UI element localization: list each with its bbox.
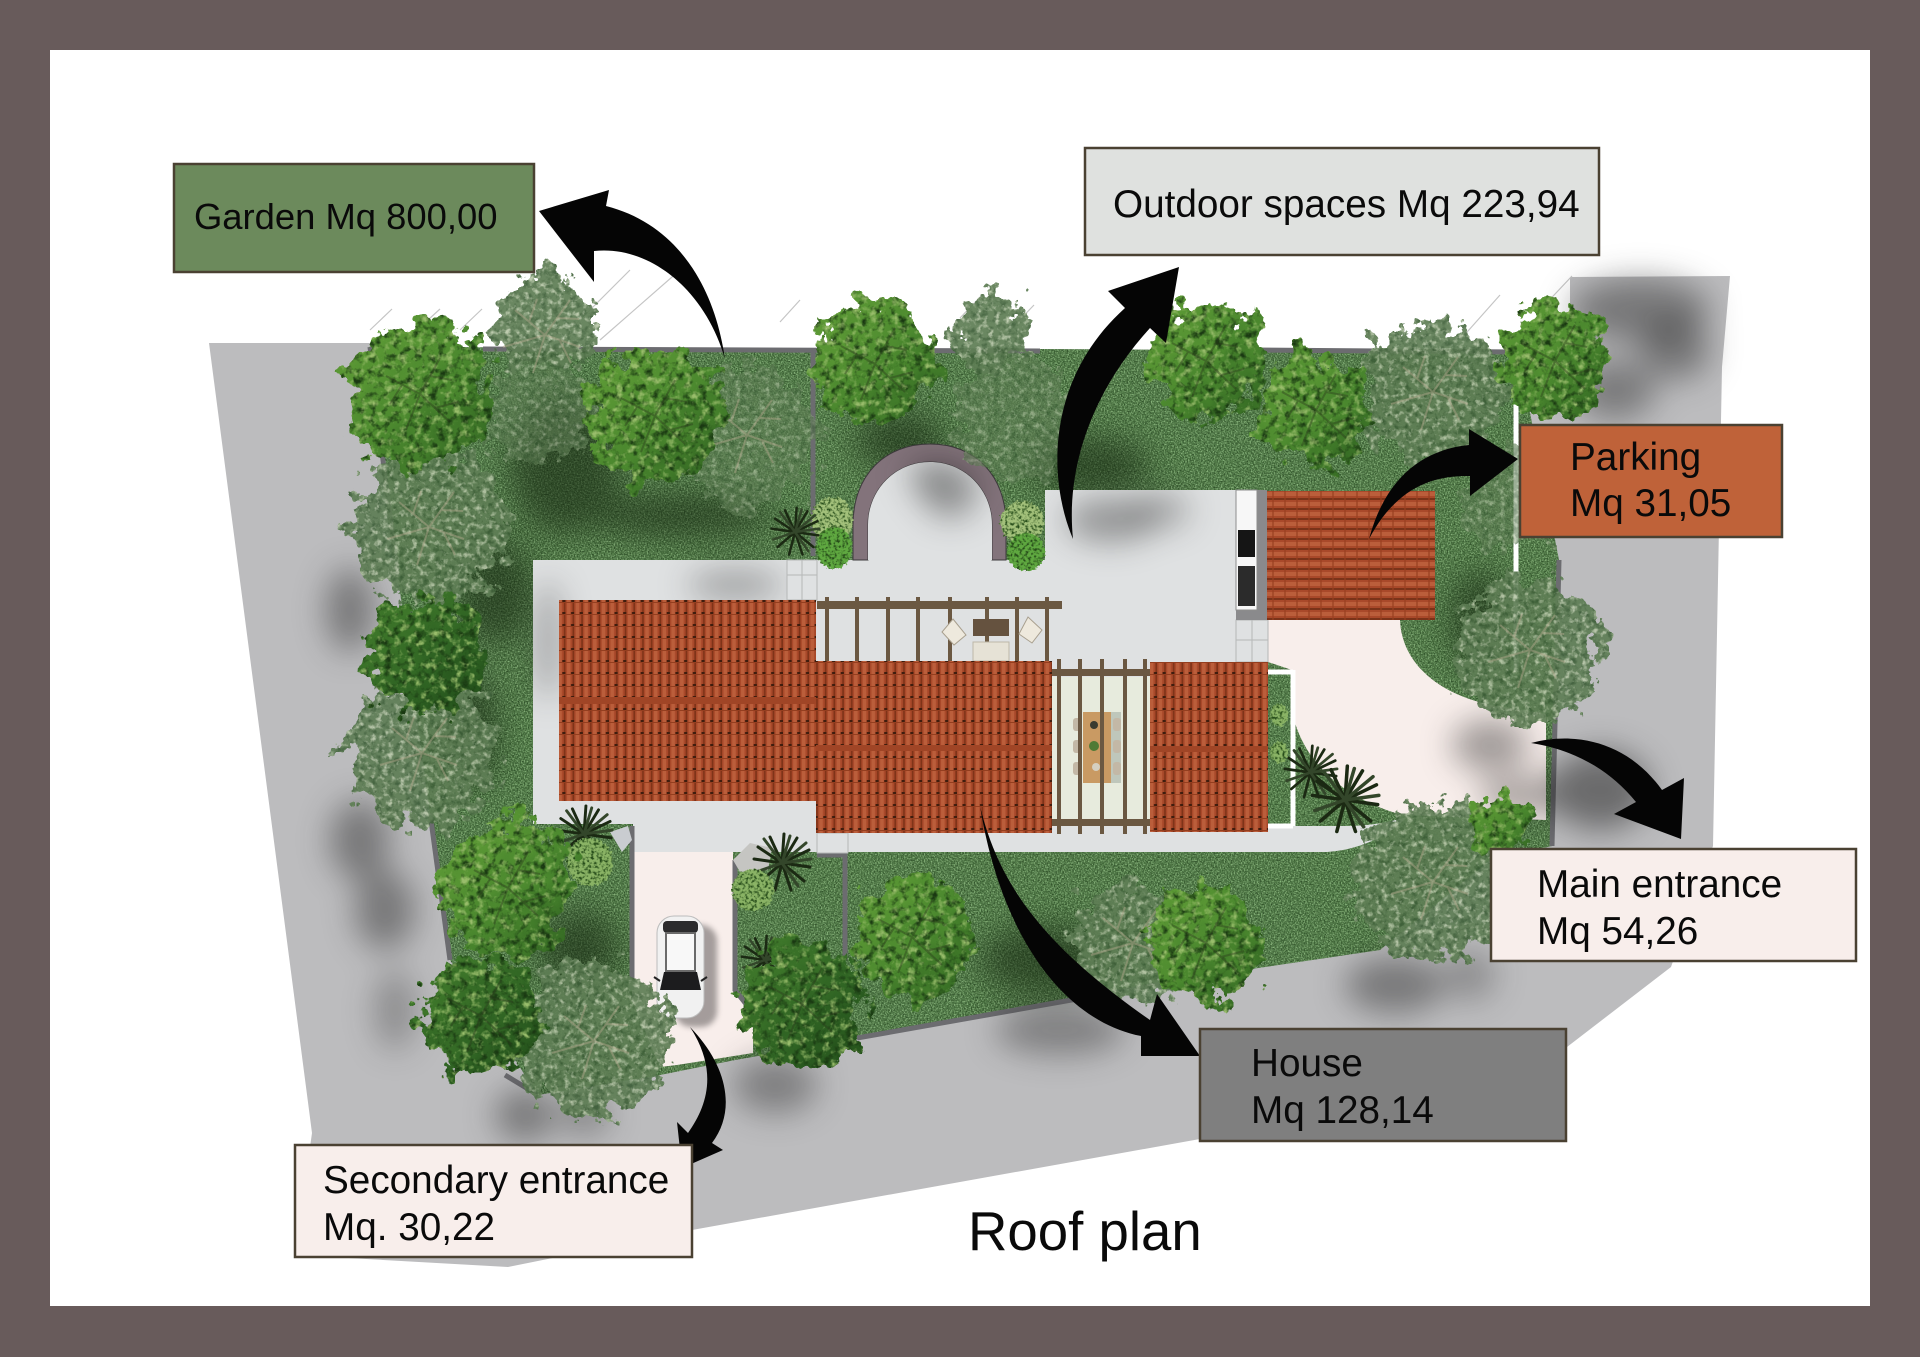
arrow: main entrance — [1531, 738, 1684, 839]
arrow: outdoor spaces — [1057, 267, 1179, 539]
pergola with lounge — [817, 597, 1062, 661]
car — [654, 916, 717, 1027]
garden walls — [370, 347, 1559, 1095]
covered dining pergola — [1052, 659, 1150, 834]
callout: house: Mq 128,14 — [1251, 1089, 1434, 1132]
road and pavement shadows — [326, 278, 1710, 1141]
entrance paving: secondary driveway — [632, 852, 753, 1067]
shadows on grass — [442, 395, 1510, 995]
roof: east wing — [1150, 662, 1268, 832]
roof: parking canopy — [1267, 491, 1435, 620]
callout: main entrance — [1491, 849, 1856, 961]
callout: outdoor spaces: Outdoor spaces Mq 223,94 — [1113, 183, 1580, 226]
callout: secondary entrance — [295, 1145, 692, 1257]
patio and pavement around the house — [533, 490, 1268, 852]
planting: bushes, palms and rocks — [557, 497, 1379, 982]
callout: main entrance: Mq 54,26 — [1537, 910, 1698, 953]
callout: parking: Parking — [1570, 436, 1701, 479]
branches of pale trees — [380, 299, 1565, 1079]
branches of vivid trees — [386, 325, 1593, 1052]
arch pergola path — [853, 444, 1006, 560]
callout: secondary entrance: Secondary entrance — [323, 1159, 669, 1202]
callout: garden: Garden Mq 800,00 — [194, 196, 497, 237]
arrow: garden — [539, 190, 725, 359]
steps — [787, 560, 1268, 853]
trees: faint see-through canopy — [485, 355, 1560, 550]
callout: parking: Mq 31,05 — [1570, 482, 1731, 525]
callout: secondary entrance: Mq. 30,22 — [323, 1206, 495, 1249]
arrow: house — [980, 806, 1200, 1056]
grass garden — [370, 347, 1559, 1095]
trees: pale canopy — [346, 274, 1604, 1119]
arrow: secondary entrance — [677, 1027, 726, 1168]
pavement curve — [1268, 817, 1407, 852]
trees: vivid canopy — [346, 302, 1611, 1076]
callout: main entrance: Main entrance — [1537, 863, 1782, 906]
outdoor kitchen — [1236, 490, 1267, 620]
white boundary line — [1268, 359, 1516, 826]
callout: parking — [1520, 425, 1782, 537]
fence hatch lines — [370, 270, 1572, 340]
callout: garden — [174, 164, 534, 272]
roof: west wing — [559, 600, 816, 801]
callout: outdoor spaces — [1085, 148, 1599, 255]
road surrounding the plot — [209, 276, 1730, 1267]
arrow: parking — [1369, 429, 1518, 539]
callout: house: House — [1251, 1042, 1363, 1085]
entrance paving: main entrance — [1268, 620, 1546, 820]
title: Roof plan — [968, 1201, 1202, 1262]
roof: central wing — [816, 661, 1052, 833]
callout: house — [1200, 1029, 1566, 1141]
